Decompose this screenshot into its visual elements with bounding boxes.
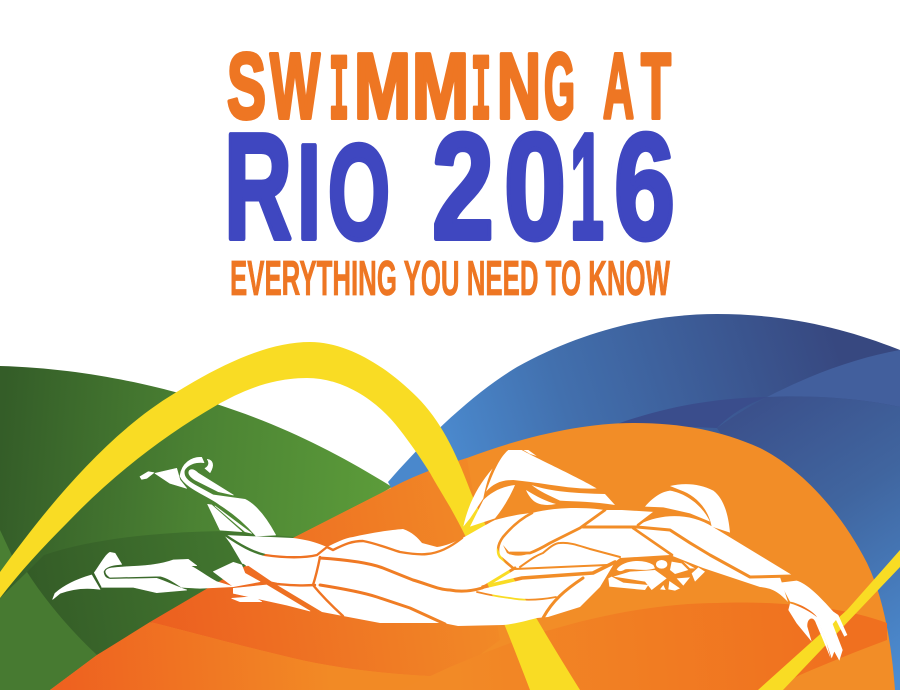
swimmer: cap, face and hand (608, 484, 847, 661)
title: Rio 2016: 6 (614, 102, 675, 270)
swimmer: main body silhouette (224, 508, 792, 626)
background: orange wave (50, 423, 895, 690)
title: Swimming at: I (329, 41, 349, 146)
title: Swimming at: M (354, 34, 411, 138)
title: Rio 2016: I (297, 116, 321, 268)
title: Swimming at: I (471, 41, 491, 146)
swimmer: raised arm (463, 450, 615, 527)
title: Swimming at: S (227, 34, 266, 138)
title: Rio 2016: R (224, 102, 292, 270)
title: Swimming at: G (544, 34, 575, 138)
background: blue wave (388, 314, 900, 690)
title: Swimming at: A (603, 34, 634, 138)
swimmer: lower leg (53, 552, 310, 611)
title: Swimming at: M (412, 34, 469, 138)
title: Swimming at: W (270, 34, 320, 138)
title: Rio 2016: 0 (504, 102, 566, 270)
title: Rio 2016: 2 (432, 102, 494, 270)
background: yellow ribbon (0, 342, 900, 690)
title: Rio 2016: O (328, 116, 390, 268)
title: Swimming at: N (497, 34, 541, 138)
swimmer: upper leg (140, 457, 276, 536)
title: Swimming at: T (641, 34, 671, 138)
title: Rio 2016: 1 (570, 102, 604, 270)
background: green wave (0, 366, 392, 690)
